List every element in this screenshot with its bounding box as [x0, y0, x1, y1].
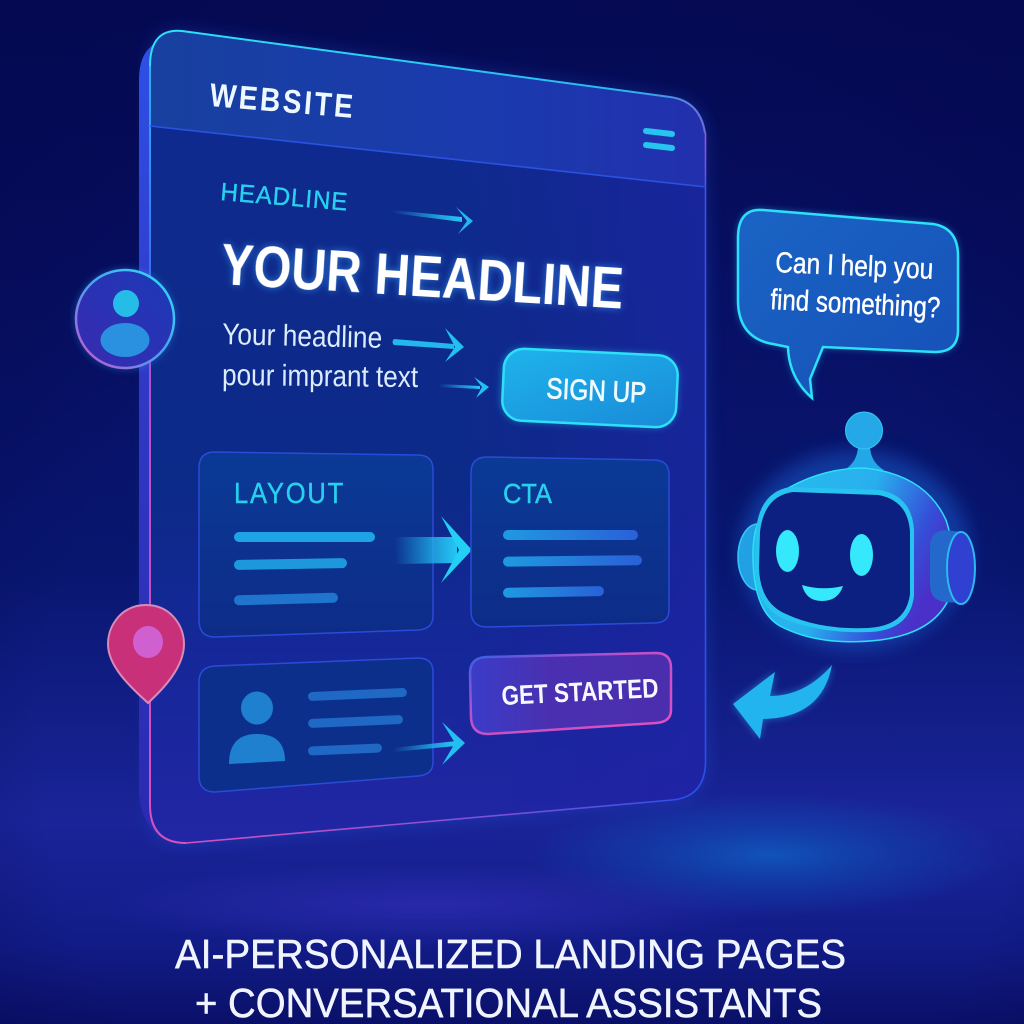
body text: Your headline [222, 318, 383, 355]
panel: website mockup [139, 31, 706, 843]
arrow: body line one [392, 328, 464, 362]
arrow: profile [393, 722, 465, 765]
panel header [150, 31, 706, 187]
arrow: layout to cta [395, 516, 472, 583]
button: get started [470, 653, 671, 734]
title [175, 931, 846, 1024]
robot antenna [844, 412, 884, 470]
button: get started: GET STARTED [501, 673, 659, 711]
card: layout [199, 452, 433, 637]
body text [222, 318, 419, 394]
title: AI-PERSONALIZED LANDING PAGES [175, 931, 846, 977]
panel right tint [150, 31, 706, 843]
robot right ear [930, 530, 975, 604]
header bar divider [150, 126, 706, 187]
card: cta: CTA [503, 478, 552, 509]
speech bubble [738, 210, 958, 398]
arrow: body line two [439, 377, 489, 398]
panel outline top [150, 31, 705, 133]
robot face rim [755, 487, 914, 632]
robot eyes [776, 530, 873, 576]
robot face screen [759, 492, 910, 628]
robot left ear [738, 524, 778, 590]
body text: pour imprant text [222, 359, 419, 394]
label: headline: HEADLINE [220, 178, 349, 216]
arrow: robot to page [733, 665, 832, 739]
floor glow [90, 793, 1010, 947]
bubble text [770, 247, 941, 325]
bubble text: Can I help you [775, 247, 934, 286]
bubble text: find something? [770, 284, 941, 325]
card: profile [199, 658, 433, 792]
icon: hamburger menu [646, 131, 672, 148]
button: sign up [500, 348, 679, 428]
robot head [753, 468, 953, 642]
card: cta [471, 457, 669, 627]
panel body [150, 31, 706, 843]
robot smile [802, 585, 843, 601]
robot assistant [738, 412, 975, 650]
panel side edge [139, 31, 186, 843]
main headline: YOUR HEADLINE [219, 232, 625, 322]
panel outline bottom [186, 800, 672, 843]
icon: user avatar [75, 269, 175, 369]
panel outline right [672, 133, 706, 800]
button: sign up: SIGN UP [546, 373, 647, 410]
card: layout: LAYOUT [234, 478, 345, 510]
panel outline left [150, 66, 186, 843]
arrow: headline [392, 207, 473, 234]
site title: WEBSITE [208, 76, 357, 125]
icon: location pin [108, 605, 184, 703]
